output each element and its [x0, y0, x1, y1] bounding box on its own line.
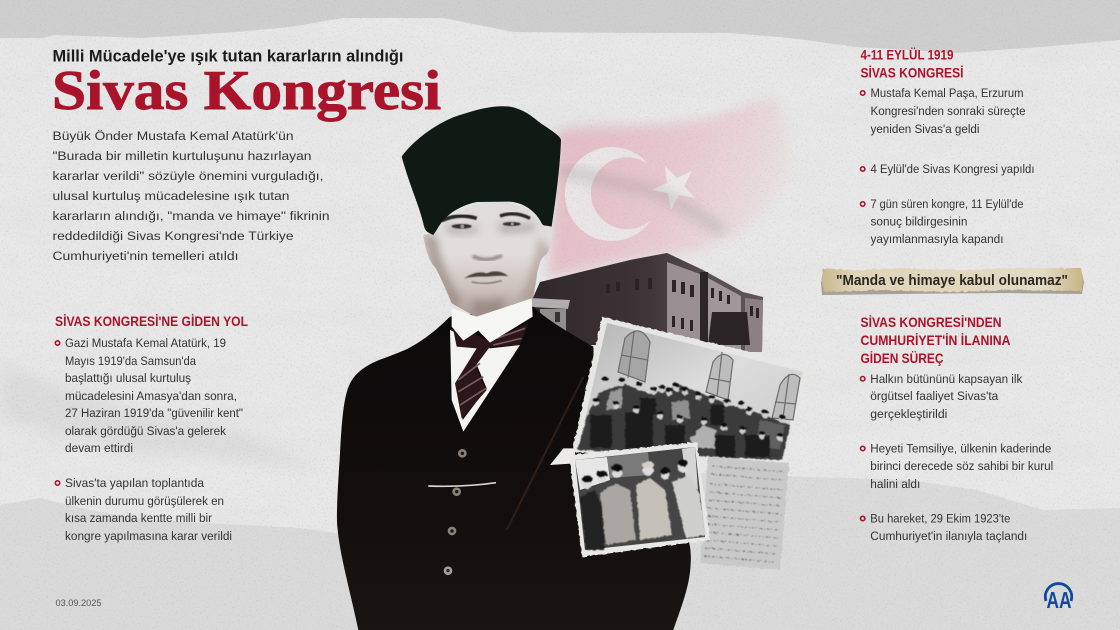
bullet 1: başlattığı ulusal kurtuluş — [65, 371, 191, 385]
buttons and watch chain — [428, 449, 496, 575]
face — [423, 202, 552, 317]
bullet 3: Cumhuriyet'in ilanıyla taçlandı — [870, 529, 1027, 543]
intro paragraph: Büyük Önder Mustafa Kemal Atatürk'ün — [52, 129, 294, 143]
bullet 2: kongre yapılmasına karar verildi — [65, 529, 232, 543]
intro paragraph: reddedildiği Sivas Kongresi'nde Türkiye — [52, 229, 294, 243]
callout: parchment quote banner: "Manda ve himaye kabul olunamaz" — [836, 273, 1068, 289]
eyes and brows — [442, 214, 530, 229]
bullet 2: ülkenin durumu görüşülerek en — [65, 494, 224, 508]
intro paragraph: kararların alındığı, "manda ve himaye" fikrinin — [52, 209, 330, 223]
building: congress building — [530, 253, 763, 352]
icon: AA logo — [1045, 584, 1072, 613]
intro paragraph: ulusal kurtuluş mücadelesine ışık tutan — [52, 189, 290, 203]
bullet 3: yayımlanmasıyla kapandı — [870, 232, 1004, 246]
section heading: SİVAS KONGRESİ'NE GİDEN YOL — [55, 314, 248, 329]
bullet 1: mücadelesini Amasya'dan sonra, — [65, 389, 237, 403]
document: handwritten congress declaration — [700, 457, 789, 570]
section heading — [860, 315, 1011, 366]
callout: parchment quote banner — [821, 268, 1084, 295]
bullet 1: örgütsel faaliyet Sivas'ta — [870, 389, 999, 403]
panel: road to the Sivas Congress — [55, 314, 248, 543]
bullet 2: Sivas'ta yapılan toplantıda — [65, 476, 204, 490]
moustache — [464, 271, 508, 278]
bullet 1 — [860, 372, 1023, 421]
bullet 2: halini aldı — [870, 477, 920, 491]
bullet 1 — [55, 336, 243, 455]
bullet 2: 4 Eylül'de Sivas Kongresi yapıldı — [870, 162, 1034, 176]
kalpak hat — [402, 106, 561, 235]
photo windows — [618, 331, 800, 420]
photo: congress group portrait — [572, 317, 810, 464]
subtitle: Milli Mücadele'ye ışık tutan kararların alındığı — [52, 46, 404, 66]
intro paragraph — [52, 129, 330, 263]
section heading: GİDEN SÜREÇ — [860, 351, 944, 366]
collar — [452, 298, 533, 343]
portrait: Mustafa Kemal Atatürk — [337, 106, 691, 630]
bullet 1: 27 Haziran 1919'da "güvenilir kent" — [65, 406, 243, 420]
bullet 1: Mayıs 1919'da Samsun'da — [65, 354, 196, 368]
intro paragraph: kararlar verildi" sözüyle önemini vurguladığı, — [52, 169, 324, 183]
photo crowd — [578, 377, 790, 460]
icon: crescent — [565, 147, 651, 241]
icon: star — [652, 166, 695, 210]
bullet 2: Heyeti Temsiliye, ülkenin kaderinde — [870, 442, 1052, 456]
bullet 2 — [860, 442, 1053, 491]
bullet 1: gerçekleştirildi — [870, 407, 947, 421]
intro paragraph: "Burada bir milletin kurtuluşunu hazırlayan — [52, 149, 312, 163]
face shading — [422, 222, 553, 315]
bullet 1: yeniden Sivas'a geldi — [870, 122, 980, 136]
bullet 3 — [860, 512, 1027, 543]
pocket handkerchief — [550, 448, 575, 465]
bullet 3: 7 gün süren kongre, 11 Eylül'de — [870, 197, 1024, 211]
delegates — [580, 460, 706, 550]
section heading: SİVAS KONGRESİ — [860, 66, 964, 80]
flag: faded Turkish flag — [548, 97, 790, 280]
panel: 4-11 September 1919 — [860, 48, 1034, 246]
portico — [708, 312, 750, 345]
section heading — [860, 48, 964, 80]
bullet 3 — [860, 197, 1024, 246]
jacket — [337, 307, 691, 630]
section heading: 4-11 EYLÜL 1919 — [860, 48, 954, 62]
main title: Sivas Kongresi — [52, 60, 441, 122]
title block — [52, 46, 441, 122]
intro paragraph: Cumhuriyeti'nin temelleri atıldı — [52, 249, 238, 263]
bullet 1: Halkın bütününü kapsayan ilk — [870, 372, 1023, 386]
date: 03.09.2025 — [56, 598, 102, 608]
shirt front — [450, 330, 520, 432]
bullet 2: birinci derecede söz sahibi bir kurul — [870, 459, 1053, 473]
bullet 1: olarak gördüğü Sivas'a gelerek — [65, 424, 227, 438]
bullet 1: Mustafa Kemal Paşa, Erzurum — [870, 86, 1024, 100]
bullet 1: devam ettirdi — [65, 441, 133, 455]
section heading: SİVAS KONGRESİ'NDEN — [860, 315, 1002, 330]
photo: delegates in overcoats — [569, 442, 710, 557]
panel: from the Congress to the Republic — [860, 315, 1053, 543]
tie — [453, 323, 528, 418]
bullet 3: Bu hareket, 29 Ekim 1923'te — [870, 512, 1010, 526]
bullet 3: sonuç bildirgesinin — [870, 214, 968, 228]
bullet 1 — [860, 86, 1026, 136]
bullet 2: kısa zamanda kentte milli bir — [65, 511, 212, 525]
icon: AA logo: AA — [1046, 587, 1072, 613]
section heading: CUMHURİYET'İN İLANINA — [860, 333, 1011, 348]
bullet 1: Gazi Mustafa Kemal Atatürk, 19 — [65, 336, 226, 350]
bullet 1: Kongresi'nden sonraki süreçte — [870, 104, 1026, 118]
bullet 2 — [55, 476, 232, 543]
